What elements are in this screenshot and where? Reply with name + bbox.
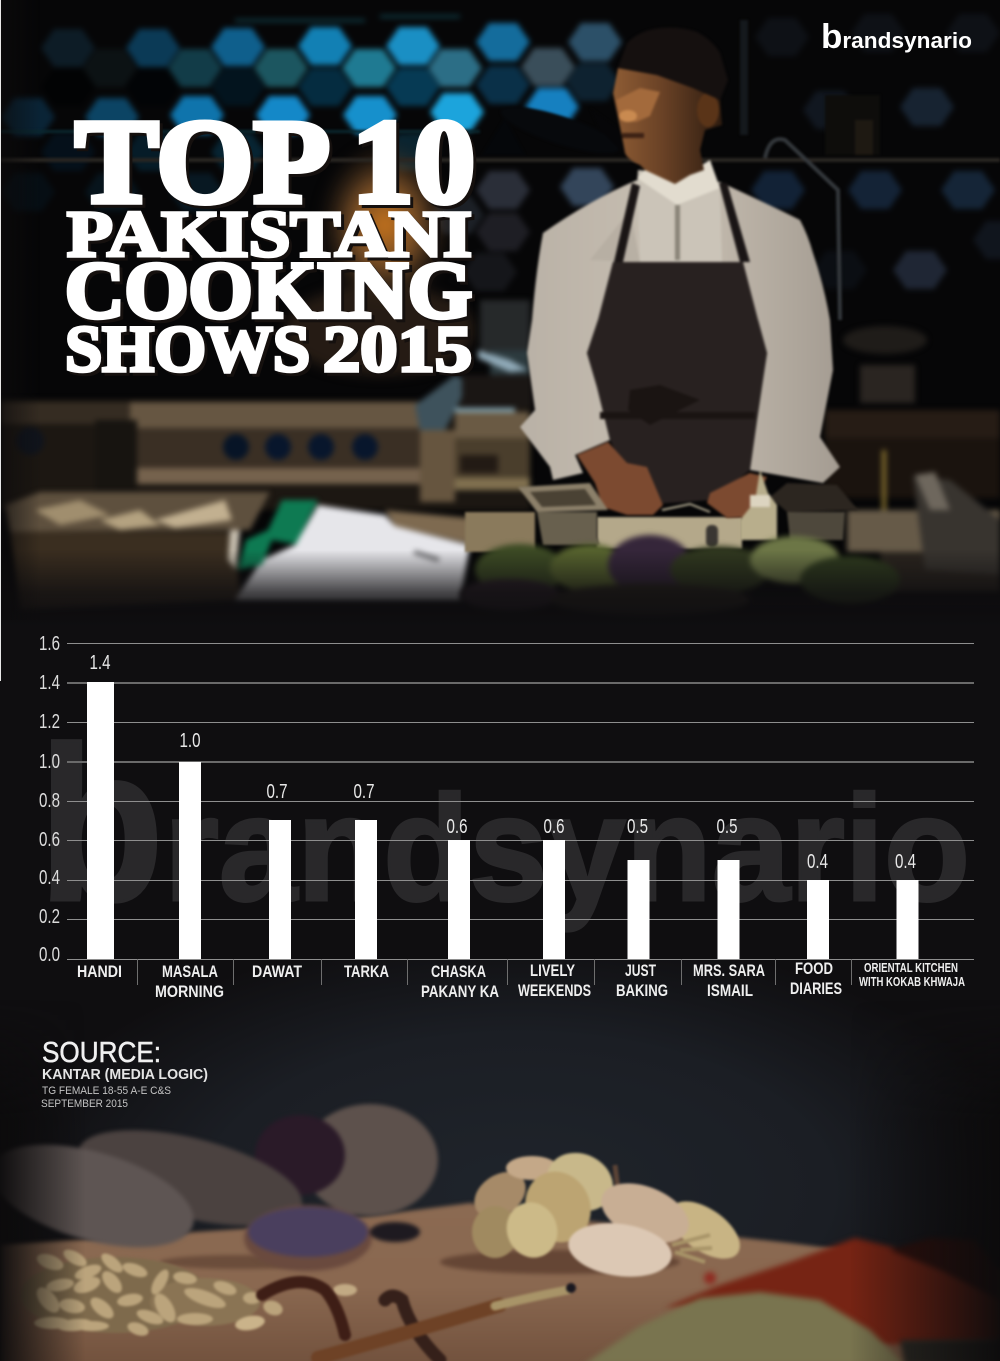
chef face and neck <box>613 68 722 184</box>
watermark: brandsynario: brandsynario <box>38 701 970 947</box>
bar value labels: 0.5 <box>716 816 738 838</box>
bar value labels: 1.0 <box>180 730 200 752</box>
wooden board <box>0 1203 1000 1361</box>
category labels: MASALA <box>162 963 218 981</box>
source heading: SOURCE: <box>42 1037 161 1069</box>
kitchen wall with hexagon tiles <box>0 0 1000 640</box>
bar value labels <box>90 652 916 873</box>
title line: top 10 <box>75 95 475 228</box>
bar chart <box>39 633 974 1001</box>
category labels: HANDI <box>77 963 122 981</box>
apron straps <box>614 183 640 262</box>
category labels: JUST <box>625 962 656 980</box>
steel shelves right <box>825 410 1000 438</box>
y axis labels: 0.4 <box>39 867 60 889</box>
category labels: BAKING <box>616 982 668 1000</box>
title line: pakistani: PAKISTANI <box>67 198 472 271</box>
squeeze bottle <box>740 470 777 540</box>
category labels: PAKANY KA <box>421 983 499 1001</box>
copper pot glow behind title <box>285 140 475 375</box>
y axis labels: 0.6 <box>39 829 60 851</box>
potatoes <box>0 1104 438 1271</box>
logo: brandsynario: brandsynario <box>821 18 972 56</box>
left edge darkening <box>0 0 40 620</box>
y axis labels: 0.8 <box>39 790 60 812</box>
chef jacket <box>520 180 840 483</box>
title shadow <box>68 98 478 389</box>
bar value labels: 0.7 <box>266 781 288 803</box>
target group: TG FEMALE 18-55 A-E C&S <box>42 1085 171 1097</box>
source name: KANTAR (MEDIA LOGIC) <box>42 1067 208 1083</box>
bars <box>87 682 918 959</box>
y axis labels <box>39 633 60 966</box>
chef collar and zip <box>637 160 722 262</box>
category labels: FOOD <box>795 960 833 978</box>
title shadow: 10 <box>355 98 478 231</box>
bar value labels: 0.4 <box>895 851 916 873</box>
chart and photo backdrop <box>0 960 1000 1361</box>
title shadow: COOKING <box>68 250 475 338</box>
category labels: LIVELY <box>530 962 575 980</box>
bar value labels: 0.7 <box>354 781 374 803</box>
title line: shows 2015 <box>65 313 472 386</box>
stove and counter, background <box>0 300 1000 592</box>
microgreens <box>460 535 900 616</box>
chef hands <box>577 442 663 515</box>
blue-lit pans behind chef arm <box>480 300 530 352</box>
title shadow: TOP <box>78 98 333 231</box>
chef <box>518 28 858 545</box>
y axis labels: 0.2 <box>39 906 60 928</box>
bar value labels: 0.6 <box>544 816 564 838</box>
category labels: DIARIES <box>790 980 842 998</box>
y axis labels: 1.4 <box>39 672 60 694</box>
title shadow: SHOWS <box>68 316 313 389</box>
category labels: DAWAT <box>252 963 302 981</box>
thin white left edge <box>0 0 1 681</box>
date: SEPTEMBER 2015 <box>41 1098 128 1110</box>
chef cap <box>618 28 728 100</box>
y axis labels: 1.6 <box>39 633 60 655</box>
photo: vegetables and spices <box>4 1102 996 1361</box>
left tray and white cloth, blurred foreground <box>5 492 475 610</box>
title line: cooking: COOKING <box>65 247 472 335</box>
y axis labels: 1.0 <box>39 751 60 773</box>
bar value labels: 0.5 <box>627 816 648 838</box>
category labels: CHASKA <box>431 963 486 981</box>
y axis labels: 1.2 <box>39 711 60 733</box>
title line: shows 2015: SHOWS <box>65 313 310 386</box>
cumin powder mound <box>583 1292 1000 1361</box>
title line: top 10: TOP <box>75 95 330 228</box>
title line: shows 2015: 2015 <box>323 313 472 386</box>
title shadow: PAKISTANI <box>70 201 475 274</box>
steel trays <box>518 483 608 512</box>
bar value labels: 0.4 <box>807 851 828 873</box>
bar value labels: 0.6 <box>446 816 468 838</box>
category labels: WEEKENDS <box>518 982 591 1000</box>
source block <box>41 1037 208 1110</box>
side vignettes <box>0 1133 1000 1361</box>
category labels: MORNING <box>155 983 224 1001</box>
chart grid lines <box>67 644 974 960</box>
shelf and pans <box>0 20 1000 320</box>
garlic <box>466 1142 750 1283</box>
title line: top 10: 10 <box>352 95 475 228</box>
vanilla pods and cinnamon stick <box>262 1282 576 1360</box>
fade into page background <box>0 550 1000 628</box>
category labels: ISMAIL <box>707 982 753 1000</box>
chart area background <box>0 627 1000 967</box>
grains <box>20 1246 357 1338</box>
title shadow: 2015 <box>326 316 475 389</box>
category labels <box>77 960 965 1001</box>
chili powder mound <box>665 1238 1000 1345</box>
tongs <box>662 504 710 512</box>
category labels: WITH KOKAB KHWAJA <box>859 975 965 989</box>
category labels: TARKA <box>344 963 389 981</box>
category separators <box>138 959 852 985</box>
category labels: ORIENTAL KITCHEN <box>864 961 958 975</box>
bar value labels: 1.4 <box>90 652 110 674</box>
photo: chef in kitchen <box>0 0 1000 640</box>
y axis labels: 0.0 <box>39 944 60 966</box>
right counter <box>847 510 1000 552</box>
apron <box>587 262 767 505</box>
category labels: MRS. SARA <box>693 962 765 980</box>
counter under hands <box>465 512 742 552</box>
title <box>65 95 478 389</box>
